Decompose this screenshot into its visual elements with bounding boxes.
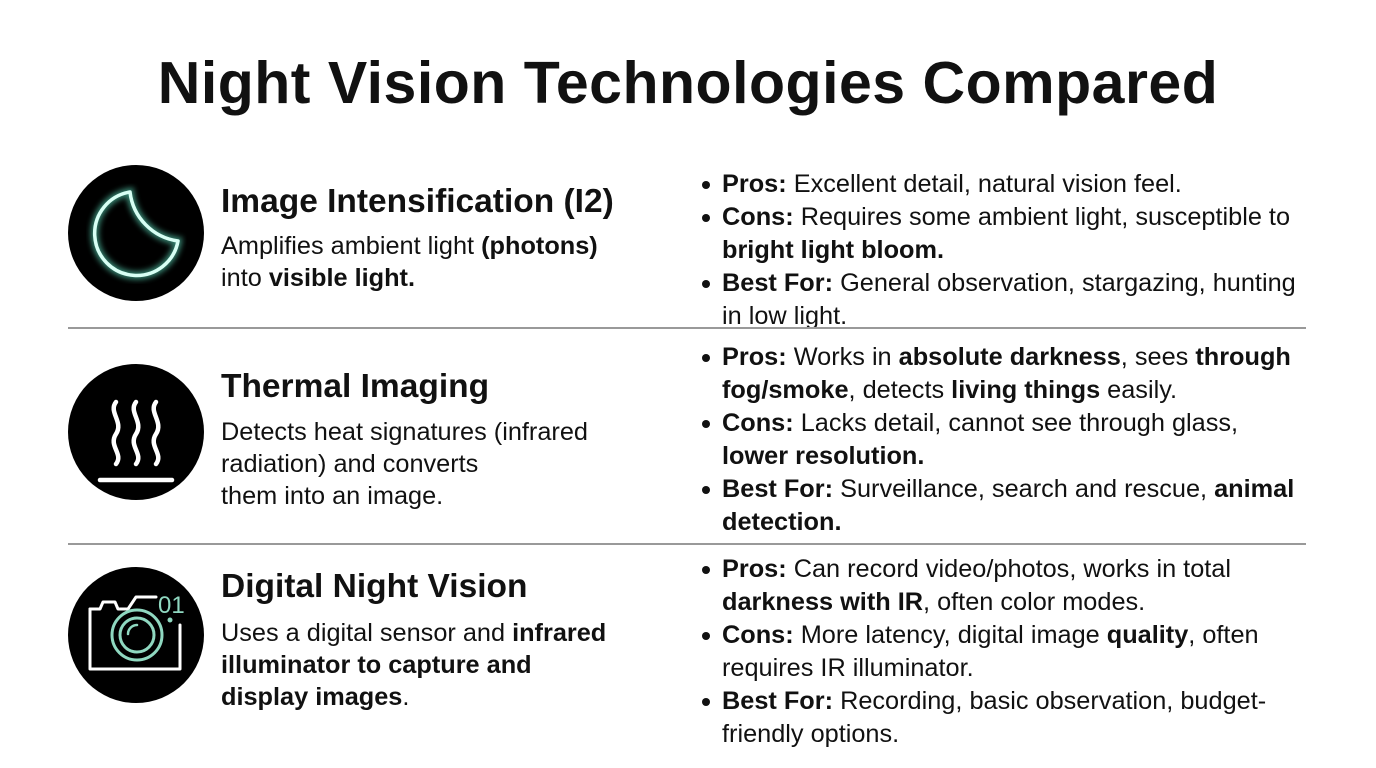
bullets: I2 [702, 170, 1296, 330]
bullets: I2: Pros: Excellent detail, natural vision feel. [722, 170, 1182, 198]
bullets: thermal: Cons: Lacks detail, cannot see through glass, lower resolution. [722, 409, 1238, 470]
bullets: digital: Pros: Can record video/photos, works in total darkness with IR, often color modes. [722, 555, 1231, 616]
bullets: thermal: Best For: Surveillance, search and rescue, animal detection. [722, 475, 1294, 536]
icon: moon [68, 165, 204, 301]
heading: image intensification: Image Intensification (I2) [221, 183, 614, 220]
text: thermal description: them into an image. [221, 482, 443, 510]
icon: heat waves [68, 364, 204, 500]
text: I2 description: Amplifies ambient light (photons) [221, 232, 598, 260]
icon: camera [68, 567, 204, 703]
text: digital description: illuminator to capture and [221, 651, 532, 679]
bullets: thermal: Pros: Works in absolute darkness, sees through fog/smoke, detects living things easily. [722, 343, 1291, 404]
text: digital description [221, 619, 606, 711]
heading: digital: Digital Night Vision [221, 568, 527, 605]
bullets: digital: Best For: Recording, basic observation, budget-friendly options. [722, 687, 1266, 748]
text: digital description: display images. [221, 683, 409, 711]
title: Night Vision Technologies Compared [158, 50, 1218, 116]
bullets: I2: Best For: General observation, stargazing, hunting in low light. [722, 269, 1296, 330]
heading: thermal: Thermal Imaging [221, 368, 489, 405]
text: I2 description: into visible light. [221, 264, 415, 292]
bullets: digital [702, 555, 1266, 748]
text: thermal description: Detects heat signatures (infrared [221, 418, 588, 446]
text: digital description: Uses a digital sensor and infrared [221, 619, 606, 647]
text: thermal description [221, 418, 588, 510]
bullets: digital: Cons: More latency, digital image quality, often requires IR illuminator. [722, 621, 1259, 682]
text: I2 description [221, 232, 598, 292]
bullets: thermal [702, 343, 1294, 536]
bullets: I2: Cons: Requires some ambient light, susceptible to bright light bloom. [722, 203, 1290, 264]
icon: camera: 01 [158, 592, 185, 619]
text: thermal description: radiation) and converts [221, 450, 478, 478]
